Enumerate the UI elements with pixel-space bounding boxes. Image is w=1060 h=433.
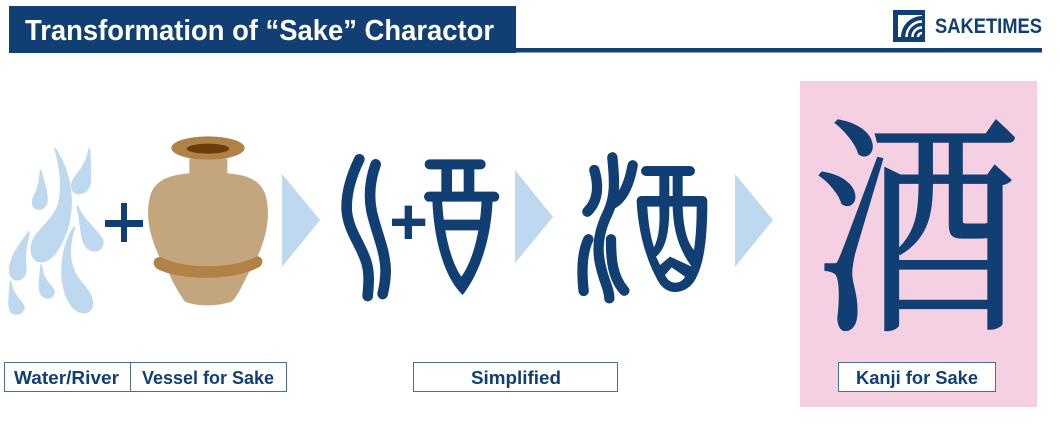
logo: SAKETIMES xyxy=(893,10,1042,42)
vessel rim xyxy=(171,136,245,160)
icon: water drops xyxy=(9,148,103,314)
label: Vessel for Sake: Vessel for Sake xyxy=(142,368,274,388)
arrow 2 xyxy=(515,170,553,263)
icon: logo mark xyxy=(893,10,925,42)
vessel part xyxy=(637,171,707,292)
vessel mouth xyxy=(187,144,229,154)
panel: kanji xyxy=(800,81,1037,407)
icon: plus xyxy=(105,203,143,242)
vessel glyph xyxy=(429,164,494,197)
label: Simplified xyxy=(414,362,618,392)
water strokes xyxy=(347,159,369,296)
icon: simplified water and vessel xyxy=(347,159,494,296)
arrow 3 xyxy=(735,174,773,267)
labels: Water/River and Vessel for Sake xyxy=(4,362,286,392)
label: Kanji for Sake: Kanji for Sake xyxy=(856,368,978,388)
label: Water/River: Water/River xyxy=(14,368,119,388)
header xyxy=(9,6,1042,53)
icon: sake vessel xyxy=(148,136,268,305)
title rule xyxy=(9,48,1042,52)
wordmark: SAKETIMES xyxy=(935,15,1042,38)
plus xyxy=(392,206,425,239)
panel background xyxy=(800,81,1037,407)
title: Transformation of “Sake” Charactor xyxy=(25,15,494,47)
kanji character: 酒 xyxy=(813,107,1021,363)
vessel band xyxy=(154,256,262,278)
vessel body xyxy=(148,158,268,305)
label: Simplified: Simplified xyxy=(471,368,561,388)
water radical xyxy=(582,157,633,298)
icon: early sake character xyxy=(582,157,707,298)
title bar xyxy=(9,6,516,53)
label: Kanji for Sake xyxy=(838,362,996,392)
arrow 1 xyxy=(282,174,320,267)
